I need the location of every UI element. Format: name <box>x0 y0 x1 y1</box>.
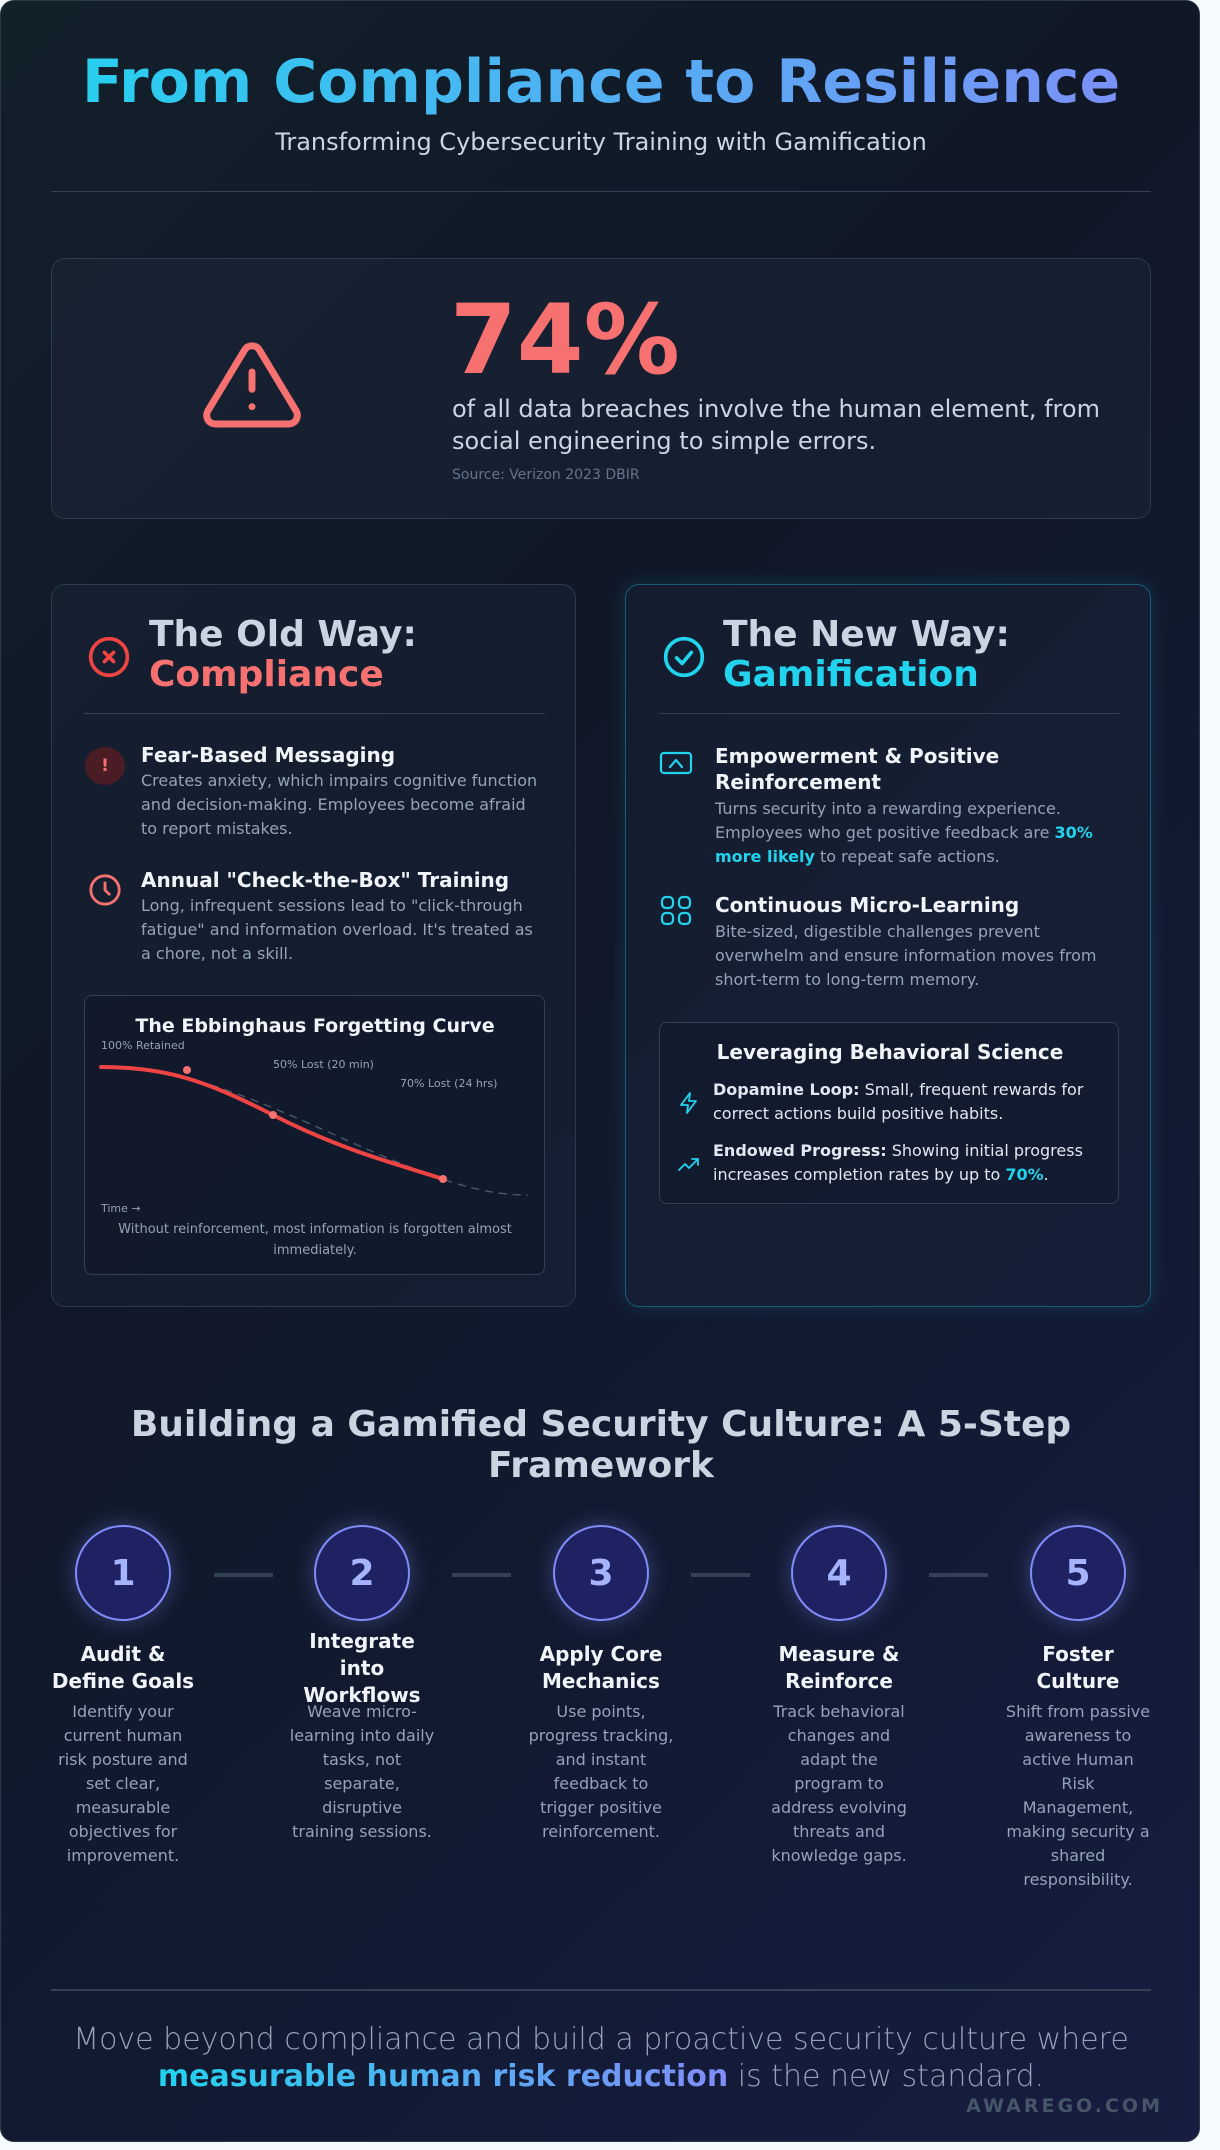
step 1: 1 <box>110 1552 136 1594</box>
step 1: Define Goals <box>52 1669 194 1693</box>
item: empowerment <box>660 744 1093 866</box>
panel: new way <box>625 584 1151 1307</box>
chart: forgetting curve <box>84 995 545 1275</box>
stat text: of all data breaches involve the human element, from social engineering to simple errors. <box>452 395 1100 455</box>
step 5: Culture <box>1036 1669 1120 1693</box>
item: micro-learning: Bite-sized, digestible challenges prevent overwhelm and ensure information moves from short-term to long-term memory. <box>715 922 1096 989</box>
item: fear: Fear-Based Messaging <box>141 743 395 767</box>
icon: clock <box>89 874 121 906</box>
panel: stat <box>51 258 1151 519</box>
chart: forgetting curve: Time → <box>100 1202 141 1215</box>
icon: grid <box>660 896 692 926</box>
step 2: tasks, not <box>323 1750 401 1769</box>
item: fear: Creates anxiety, which impairs cognitive function and decision-making. Employees become afraid to report mistakes. <box>141 771 537 838</box>
step 2: 2 <box>349 1552 375 1594</box>
heading: Compliance <box>149 654 384 695</box>
stat number: 74% <box>450 284 680 396</box>
step 1 <box>52 1514 194 1865</box>
icon: exclamation <box>85 747 125 785</box>
step 5: Shift from passive awareness to active Human Risk Management, making security a shared responsibility. <box>1006 1702 1150 1889</box>
step 5: Foster <box>1042 1642 1114 1666</box>
subtitle: Transforming Cybersecurity Training with Gamification <box>275 128 927 156</box>
panel: behavioral science: Leveraging Behavioral Science <box>717 1040 1063 1064</box>
step 4 <box>771 1514 907 1865</box>
icon: x circle <box>88 636 130 678</box>
brand: AWAREGO.COM <box>966 2095 1163 2117</box>
section heading: Building a Gamified Security Culture: A 5-Step Framework <box>131 1404 1071 1486</box>
item: micro-learning: Continuous Micro-Learning <box>715 893 1019 917</box>
item: micro-learning <box>660 893 1096 989</box>
title: From Compliance to Resilience <box>82 47 1120 117</box>
step 3: Apply Core <box>540 1642 662 1666</box>
icon: chart box <box>660 752 692 774</box>
step 4: Measure & <box>779 1642 899 1666</box>
step 2: disruptive <box>322 1798 402 1817</box>
step 2: learning into daily <box>290 1726 434 1745</box>
step 2: separate, <box>324 1774 400 1793</box>
step 2: Weave micro- <box>307 1702 417 1721</box>
step 5 <box>1006 1514 1150 1889</box>
step 2 <box>290 1514 434 1841</box>
step 1: Audit & <box>81 1642 165 1666</box>
step 1: Identify your current human risk posture and set clear, measurable objectives for improvement. <box>58 1702 188 1865</box>
heading <box>723 614 1010 695</box>
chart: forgetting curve: immediately. <box>273 1243 357 1258</box>
panel: behavioral science: Dopamine Loop: Small, frequent rewards for correct actions build positive habits. <box>713 1080 1083 1123</box>
item: fear <box>85 743 537 838</box>
item: annual: Long, infrequent sessions lead to "click-through fatigue" and information overload. It's treated as a chore, not a skill. <box>141 896 533 963</box>
heading: The Old Way: <box>149 614 417 655</box>
item: annual <box>89 868 533 963</box>
step 5: 5 <box>1065 1552 1091 1594</box>
step 4: Reinforce <box>785 1669 893 1693</box>
step 2: into <box>340 1656 384 1680</box>
footer statement: Move beyond compliance and build a proactive security culture where measurable human risk reduction is the new standard. <box>73 2022 1129 2094</box>
panel: old way <box>51 584 576 1307</box>
item: empowerment: Empowerment & Positive Reinforcement <box>715 744 999 794</box>
icon: lightning <box>680 1092 697 1114</box>
chart: forgetting curve: 50% Lost (20 min) <box>273 1058 374 1071</box>
step 4: Track behavioral changes and adapt the program to address evolving threats and knowledge gaps. <box>771 1702 907 1865</box>
step 2: training sessions. <box>292 1822 432 1841</box>
step 2: Integrate <box>309 1629 415 1653</box>
icon: exclamation: ! <box>101 756 109 776</box>
item: annual: Annual "Check-the-Box" Training <box>141 868 509 892</box>
panel: behavioral science <box>659 1022 1119 1204</box>
step 3 <box>529 1514 673 1841</box>
step 3: 3 <box>588 1552 614 1594</box>
icon: check circle <box>664 636 704 678</box>
heading: The New Way: <box>723 614 1010 655</box>
item: empowerment: Turns security into a rewarding experience. Employees who get positive feedback are 30% more likely to repeat safe actions. <box>715 799 1093 866</box>
panel: behavioral science: Endowed Progress: Showing initial progress increases completion rates by up to 70%. <box>713 1141 1083 1184</box>
chart: forgetting curve: 100% Retained <box>101 1039 185 1052</box>
source: Source: Verizon 2023 DBIR <box>452 467 640 483</box>
icon: trend <box>678 1158 699 1171</box>
icon: warning <box>203 342 301 428</box>
step 3: Use points, progress tracking, and instant feedback to trigger positive reinforcement. <box>529 1702 673 1841</box>
step 3: Mechanics <box>542 1669 660 1693</box>
chart: forgetting curve: The Ebbinghaus Forgetting Curve <box>135 1015 495 1037</box>
chart: forgetting curve: 70% Lost (24 hrs) <box>400 1077 497 1090</box>
chart: forgetting curve: Without reinforcement, most information is forgotten almost <box>118 1222 512 1237</box>
step 2: Workflows <box>303 1683 421 1707</box>
heading <box>149 614 417 695</box>
step 4: 4 <box>826 1552 852 1594</box>
heading: Gamification <box>723 654 979 695</box>
